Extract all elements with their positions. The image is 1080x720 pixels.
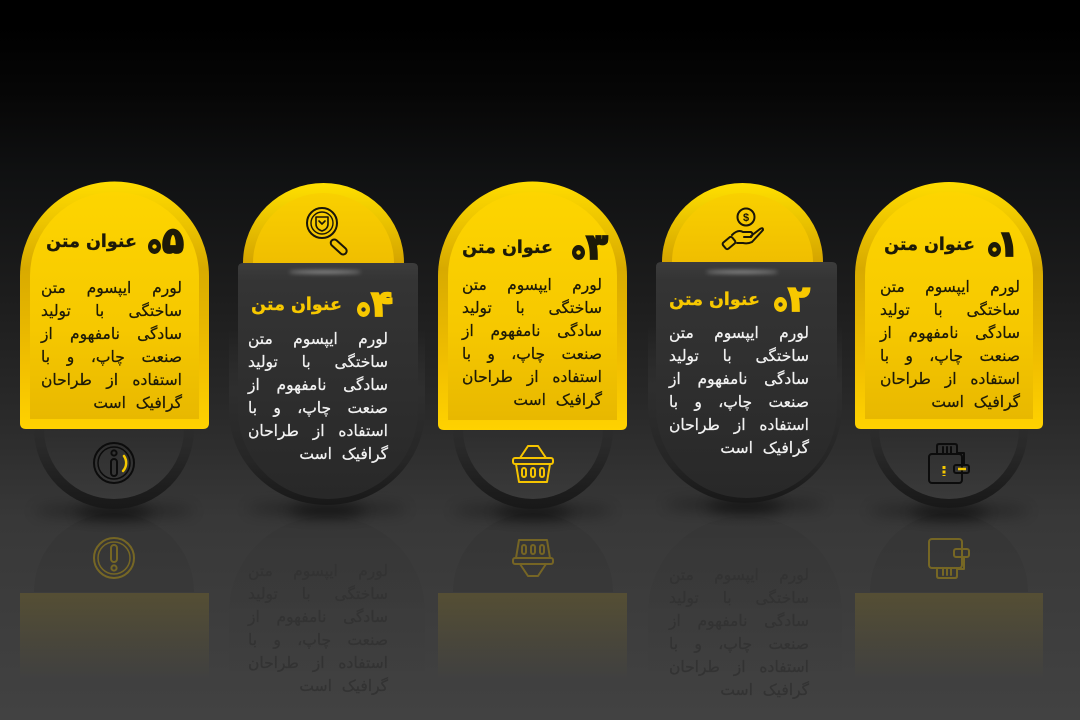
reflection text: card 02: ساختگی با تولید [669, 589, 809, 607]
text: card 02: سادگی نامفهوم از [669, 370, 809, 388]
heading: card 02: ۲ [788, 279, 810, 320]
text: card 02 [668, 324, 810, 457]
reflection text: card 04: سادگی نامفهوم از [248, 608, 388, 626]
text: card 04: ساختگی با تولید [248, 353, 388, 371]
panel: card 01 [855, 182, 1043, 524]
text: card 05: ساختگی با تولید [41, 302, 182, 320]
heading: card 02 [669, 279, 810, 320]
reflection text: card 04: لورم ایپسوم متن [248, 562, 388, 580]
text: card 05: سادگی نامفهوم از [41, 325, 182, 343]
text: card 05: گرافیک است [93, 394, 182, 412]
text: card 03: استفاده از طراحان [462, 368, 602, 386]
reflection: card 02 [668, 566, 809, 699]
heading: card 03: ۳ [586, 227, 608, 268]
heading: card 04 [251, 284, 393, 325]
reflection text: card 02: صنعت چاپ، و با [669, 635, 809, 653]
reflection: card 04 [247, 562, 388, 695]
heading: card 03 [462, 227, 608, 268]
heading: card 01 [884, 224, 1019, 265]
panel: card 02 [656, 183, 837, 518]
heading: card 01: ۱ [997, 224, 1019, 265]
text: card 04: صنعت چاپ، و با [248, 399, 388, 417]
icon: hand with coin [722, 208, 763, 250]
text: card 02: ساختگی با تولید [669, 347, 809, 365]
text: card 03: سادگی نامفهوم از [462, 322, 602, 340]
text: card 04: سادگی نامفهوم از [248, 376, 388, 394]
reflection text: card 02 [668, 566, 809, 699]
icon: magnifier [307, 208, 348, 256]
icon: hand with coin: $ [743, 212, 749, 224]
icon: basket [513, 446, 553, 482]
reflection text: card 04: استفاده از طراحان [248, 654, 388, 672]
reflection text: card 04: گرافیک است [299, 677, 388, 695]
heading: card 03: عنوان متن [462, 238, 553, 258]
reflection: card 01 [855, 538, 1043, 649]
text: card 01: سادگی نامفهوم از [880, 324, 1020, 342]
heading: card 04: عنوان متن [251, 295, 342, 315]
reflection text: card 02: لورم ایپسوم متن [669, 566, 809, 584]
heading: card 04: ۴ [371, 284, 393, 325]
text: card 03: صنعت چاپ، و با [462, 345, 602, 363]
text: card 05 [40, 279, 182, 412]
text: card 05: صنعت چاپ، و با [41, 348, 182, 366]
heading: card 05: ۵ [162, 221, 184, 262]
heading: card 01: عنوان متن [884, 235, 975, 255]
reflection text: card 04: صنعت چاپ، و با [248, 631, 388, 649]
text: card 03: گرافیک است [513, 391, 602, 409]
text: card 03: لورم ایپسوم متن [462, 276, 602, 294]
panel: card 04 [238, 183, 418, 522]
reflection text: card 04: ساختگی با تولید [248, 585, 388, 603]
text: card 01: صنعت چاپ، و با [880, 347, 1020, 365]
text: card 04: لورم ایپسوم متن [248, 330, 388, 348]
text: card 01: ساختگی با تولید [880, 301, 1020, 319]
reflection: card 05 [20, 537, 209, 649]
text: card 02: استفاده از طراحان [669, 416, 809, 434]
text: card 04: استفاده از طراحان [248, 422, 388, 440]
text: card 04 [247, 330, 388, 463]
text: card 02: لورم ایپسوم متن [669, 324, 809, 342]
heading: card 05: عنوان متن [46, 232, 137, 252]
heading: card 02: عنوان متن [669, 290, 760, 310]
text: card 03 [461, 276, 602, 409]
text: card 03: ساختگی با تولید [462, 299, 602, 317]
panel: card 03 [438, 182, 627, 524]
reflection text: card 02: گرافیک است [720, 681, 809, 699]
text: card 05: استفاده از طراحان [41, 371, 182, 389]
text: card 01 [879, 278, 1020, 411]
panel: card 05 [20, 182, 209, 524]
text: card 05: لورم ایپسوم متن [41, 279, 182, 297]
reflection: card 03 [438, 539, 627, 649]
heading: card 05 [46, 221, 184, 262]
icon: info [94, 443, 134, 483]
reflection text: card 04 [248, 562, 388, 695]
text: card 01: استفاده از طراحان [880, 370, 1020, 388]
reflection text: card 02: سادگی نامفهوم از [669, 612, 809, 630]
text: card 02: صنعت چاپ، و با [669, 393, 809, 411]
text: card 01: لورم ایپسوم متن [880, 278, 1020, 296]
icon: wallet [929, 444, 969, 483]
text: card 02: گرافیک است [720, 439, 809, 457]
text: card 01: گرافیک است [931, 393, 1020, 411]
text: card 04: گرافیک است [299, 445, 388, 463]
reflection text: card 02: استفاده از طراحان [669, 658, 809, 676]
